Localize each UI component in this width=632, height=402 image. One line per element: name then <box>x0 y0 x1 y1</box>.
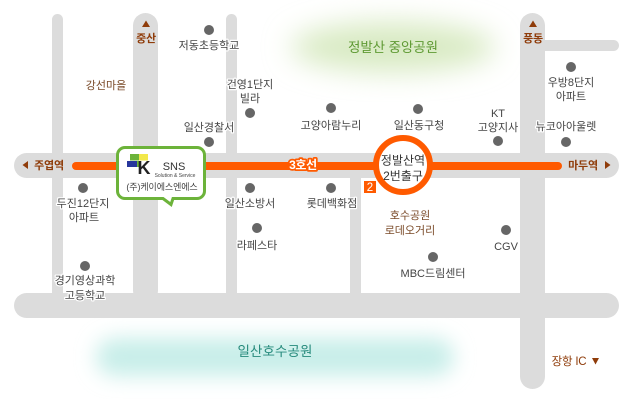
direction: Janghang IC: 장항 IC <box>552 355 586 368</box>
landmark labels: 호수공원 <box>390 209 430 222</box>
landmark labels: 고등학교 <box>65 289 105 302</box>
direction: Jungsan: 중산 <box>136 31 156 45</box>
landmark labels: 빌라 <box>240 92 260 105</box>
direction: Pungdong: 풍동 <box>523 32 543 45</box>
landmark labels: 아파트 <box>69 211 99 224</box>
direction: Madu station: 마두역 <box>568 159 598 172</box>
subway line 3: 3호선 <box>289 158 317 172</box>
subway line 3 <box>72 158 562 172</box>
landmark labels: MBC드림센터 <box>401 267 465 280</box>
park: Jeongbalsan central park: 정발산 중앙공원 <box>348 40 438 55</box>
direction: Janghang IC <box>552 355 599 368</box>
landmark labels: 일산경찰서 <box>184 120 234 134</box>
landmark labels: 롯데백화점 <box>307 197 357 210</box>
station marker: 정발산역 <box>381 154 425 168</box>
exit number badge <box>364 181 376 194</box>
company callout: Solution & Service <box>155 173 196 179</box>
exit number badge: 2 <box>367 182 373 194</box>
landmark labels: 일산동구청 <box>394 118 444 132</box>
direction: Madu station <box>568 159 610 172</box>
landmark labels: 저동초등학교 <box>179 39 239 52</box>
landmark labels: 건영1단지 <box>227 78 273 91</box>
landmark labels: 우방8단지 <box>548 76 594 89</box>
landmark labels: 강선마을 <box>86 79 126 92</box>
park: Jeongbalsan central park <box>291 22 495 72</box>
company callout: (주)케이에스엔에스 <box>126 182 198 192</box>
landmark labels <box>55 39 596 302</box>
landmark labels: 로데오거리 <box>385 224 435 237</box>
landmark labels: 뉴코아아울렛 <box>536 120 596 133</box>
landmark dots <box>78 25 576 271</box>
direction: Jungsan <box>136 20 156 45</box>
landmark labels: 고양아람누리 <box>301 119 361 132</box>
landmark labels: 두진12단지 <box>57 197 109 210</box>
station marker <box>376 138 430 192</box>
landmark labels: 라페스타 <box>237 239 277 252</box>
landmark labels: 일산소방서 <box>225 196 275 210</box>
direction: Juyeop station: 주엽역 <box>34 158 64 172</box>
station marker: 2번출구 <box>383 169 423 183</box>
company logo: K <box>138 158 150 178</box>
park: Ilsan lake park: 일산호수공원 <box>237 344 313 359</box>
company callout <box>118 148 204 204</box>
landmark labels: 아파트 <box>556 90 586 103</box>
landmark labels: CGV <box>494 241 519 253</box>
direction: Juyeop station <box>22 158 64 172</box>
landmark labels: KT <box>491 108 505 120</box>
landmark labels: 경기영상과학 <box>55 274 115 287</box>
park: Ilsan lake park <box>96 338 454 376</box>
landmark labels: 고양지사 <box>478 121 518 134</box>
company callout: SNS <box>163 161 185 173</box>
direction: Pungdong <box>523 20 543 45</box>
